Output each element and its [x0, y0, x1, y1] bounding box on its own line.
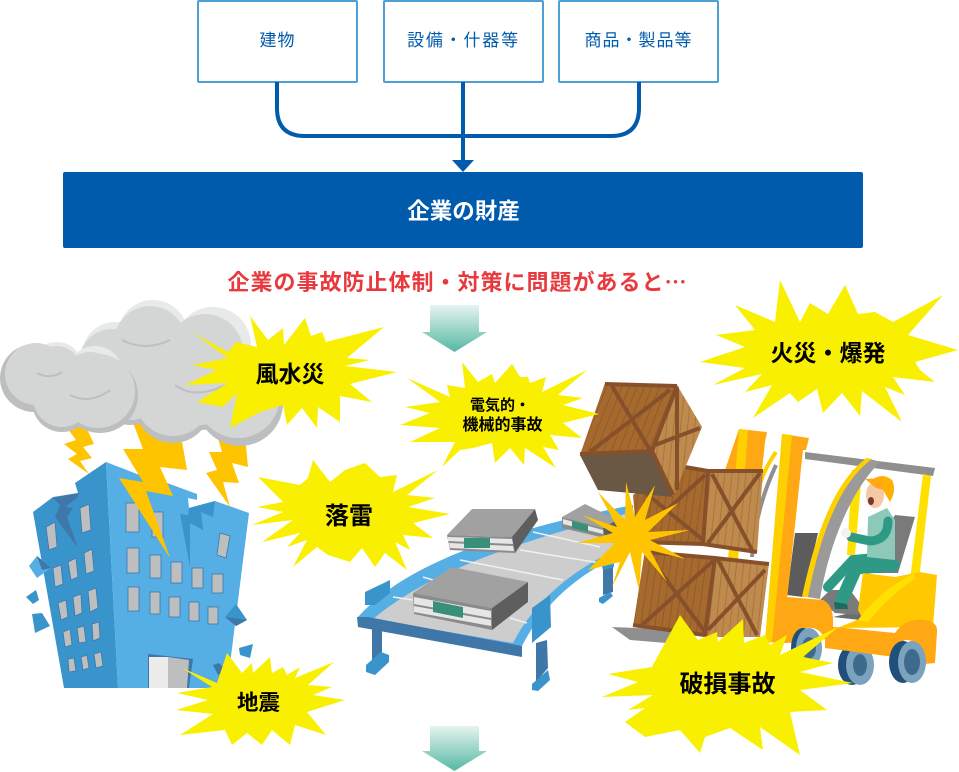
burst: 破損事故 — [602, 615, 853, 755]
posts and legs — [365, 580, 551, 691]
impact star — [577, 482, 690, 590]
box: 商品・製品等 — [559, 1, 718, 82]
front mast — [765, 434, 809, 643]
cab interior — [787, 515, 915, 620]
driver — [828, 476, 895, 609]
storm cloud: large — [79, 300, 283, 446]
box: large — [413, 567, 528, 630]
curved front pillar — [807, 458, 880, 599]
debris — [26, 556, 253, 675]
burst: 風水災 — [185, 316, 397, 428]
red heading: 企業の事故防止体制・対策に問題があると… — [227, 265, 688, 297]
box: 設備・什器等 — [384, 1, 543, 82]
box: 商品・製品等: 商品・製品等 — [584, 31, 692, 50]
arrow: top down — [422, 305, 487, 352]
crate: middle — [633, 465, 763, 553]
illustration: building struck by lightning — [0, 300, 283, 688]
rear mast — [725, 429, 767, 560]
crate: bottom — [633, 550, 769, 637]
belt — [358, 505, 633, 646]
box: middle — [447, 509, 538, 553]
rear wheel, inner — [838, 645, 874, 685]
box: far — [562, 504, 620, 538]
hoses behind mast — [752, 452, 776, 557]
box: 建物 — [198, 1, 357, 82]
burst: 火災・爆発: 火災・爆発 — [770, 340, 886, 366]
bolt in front of building — [119, 420, 187, 558]
cab roof and rear pillars — [805, 452, 935, 580]
box: 設備・什器等: 設備・什器等 — [407, 31, 520, 50]
illustration: conveyor belt — [357, 504, 633, 691]
burst: 地震: 地震 — [237, 691, 280, 715]
burst: 電気的・機械的事故 — [400, 362, 599, 468]
burst: 電気的・機械的事故: 機械的事故 — [462, 415, 543, 434]
burst: 破損事故: 破損事故 — [680, 671, 776, 698]
burst: 落雷: 落雷 — [325, 503, 373, 530]
arrow: bottom down — [422, 726, 487, 771]
burst: 地震 — [176, 653, 345, 745]
box: 建物: 建物 — [260, 31, 296, 50]
body — [765, 572, 937, 664]
burst: 火災・爆発 — [700, 280, 958, 422]
back leg — [598, 545, 614, 604]
burst: 落雷 — [252, 460, 450, 570]
illustration: forklift — [725, 429, 937, 685]
burst: 電気的・機械的事故: 電気的・ — [470, 396, 530, 414]
illustration: falling wooden crates — [580, 383, 769, 645]
fork — [612, 627, 690, 645]
storm cloud: small — [0, 342, 138, 433]
burst: 風水災: 風水災 — [256, 361, 324, 387]
connector arrow to main bar — [277, 82, 639, 172]
wheels, outer — [791, 628, 926, 683]
lightning bolts behind building — [64, 425, 248, 507]
main bar: 企業の財産: 企業の財産 — [407, 199, 520, 224]
front frame — [357, 617, 522, 657]
crate: top tilted — [580, 383, 702, 497]
main bar: 企業の財産 — [63, 172, 863, 248]
building — [33, 462, 249, 688]
asset boxes row — [198, 1, 718, 82]
